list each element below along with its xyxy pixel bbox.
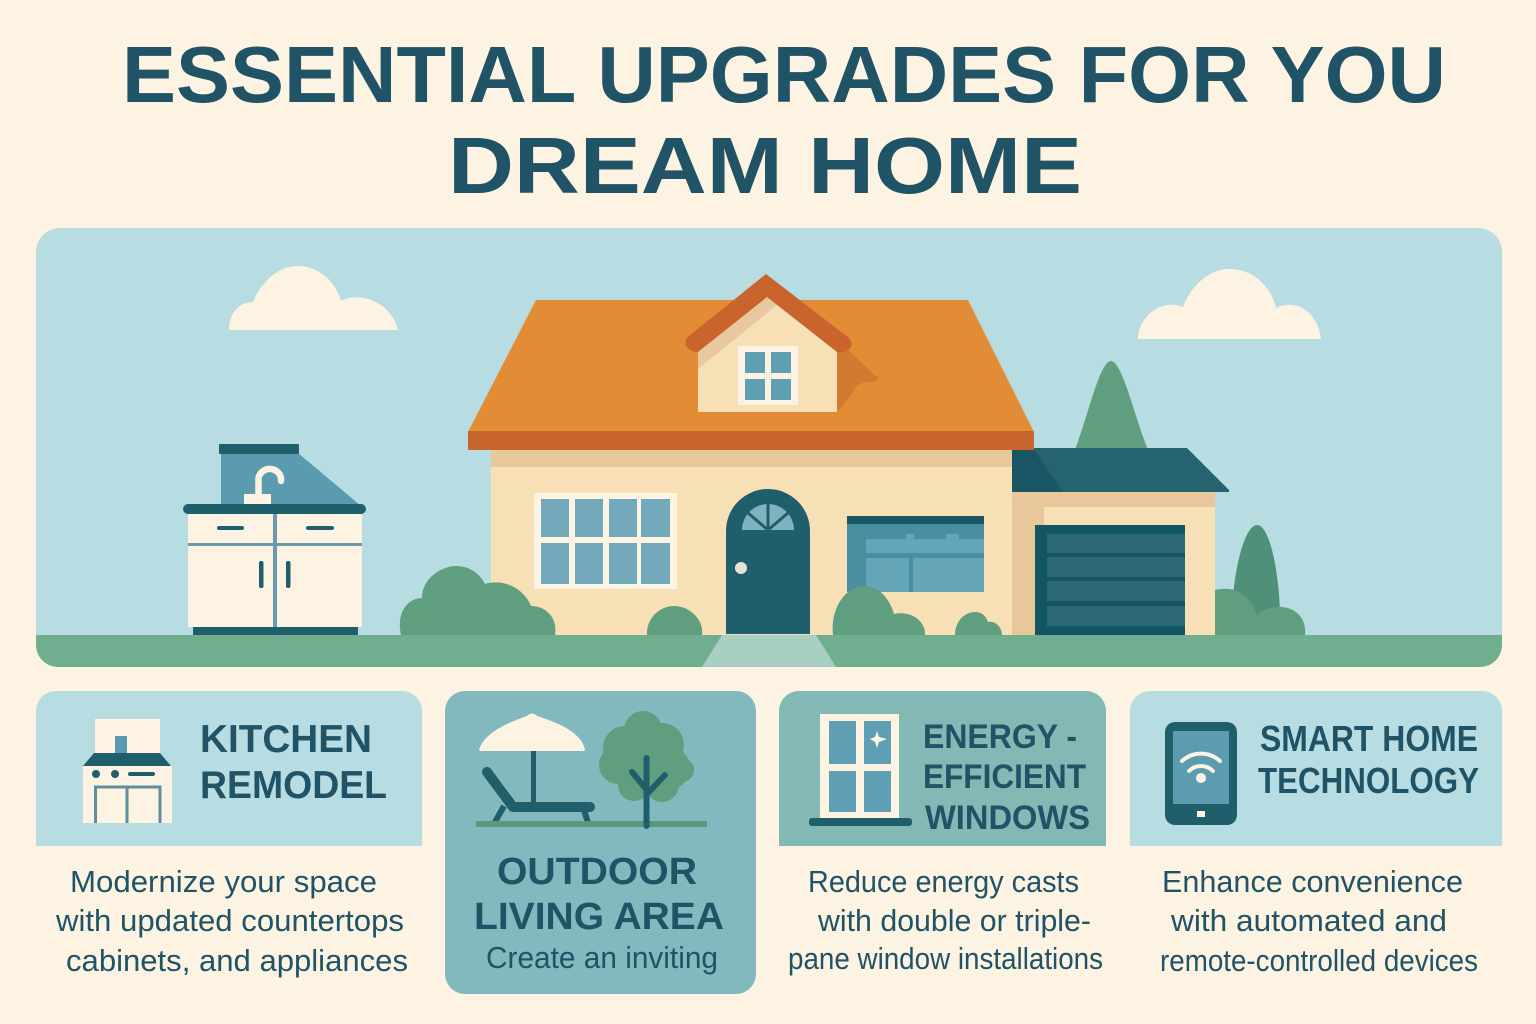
description: Modernize your space xyxy=(70,864,377,899)
panel: kitchen remodel xyxy=(36,691,422,978)
heading: LIVING AREA xyxy=(474,896,724,938)
description: remote-controlled devices xyxy=(1160,943,1478,978)
hood xyxy=(221,453,360,505)
panel: smart home technology xyxy=(1130,691,1502,978)
roof eave xyxy=(468,431,1034,450)
description xyxy=(1160,864,1478,978)
description: pane window installations xyxy=(788,941,1103,976)
description: Create an inviting xyxy=(486,940,718,975)
panel: house scene xyxy=(36,228,1502,667)
faucet xyxy=(244,469,281,505)
icon: tablet xyxy=(1165,722,1237,825)
ground line xyxy=(476,821,707,827)
header xyxy=(36,691,422,846)
heading: WINDOWS xyxy=(925,799,1090,837)
sky xyxy=(36,228,1502,667)
icon: kitchen illustration xyxy=(183,444,366,635)
wall xyxy=(491,445,1012,635)
icon: umbrella and lounger xyxy=(479,714,590,826)
roof xyxy=(468,300,1034,432)
heading: REMODEL xyxy=(200,764,387,807)
panel: outdoor living area xyxy=(445,691,756,994)
heading: ENERGY - xyxy=(923,718,1077,756)
icon: kitchen xyxy=(83,719,172,823)
heading: KITCHEN xyxy=(200,718,372,761)
heading xyxy=(474,851,724,938)
dormer shadow xyxy=(837,350,878,412)
counter xyxy=(183,504,366,514)
title: ESSENTIAL UPGRADES FOR YOU xyxy=(122,30,1446,119)
heading: EFFICIENT xyxy=(923,758,1086,796)
panel: energy-efficient windows xyxy=(779,691,1106,976)
heading xyxy=(1258,718,1479,801)
lawn xyxy=(36,635,1502,667)
cloud right xyxy=(1138,269,1321,339)
tree behind garage xyxy=(1075,361,1148,450)
dormer window xyxy=(738,346,798,405)
door fanlight xyxy=(742,504,794,530)
shrubs xyxy=(400,525,1305,635)
description: Reduce energy casts xyxy=(808,864,1079,899)
title: DREAM HOME xyxy=(448,121,1082,210)
heading xyxy=(923,718,1090,837)
heading: TECHNOLOGY xyxy=(1258,760,1479,801)
description: cabinets, and appliances xyxy=(66,943,408,978)
description: Enhance convenience xyxy=(1162,864,1463,899)
cabinet xyxy=(188,514,362,627)
heading: SMART HOME xyxy=(1260,718,1478,759)
large window xyxy=(534,493,677,589)
garage xyxy=(1012,448,1229,635)
description: with automated and xyxy=(1170,903,1447,938)
house xyxy=(468,274,1034,635)
title xyxy=(122,30,1446,210)
description xyxy=(788,864,1103,976)
heading xyxy=(200,718,387,807)
icon: tree xyxy=(599,711,694,826)
description: with double or triple- xyxy=(817,903,1091,938)
heading: OUTDOOR xyxy=(497,851,697,893)
description: with updated countertops xyxy=(55,903,404,938)
garden path xyxy=(702,635,836,667)
picture window xyxy=(847,516,984,592)
description xyxy=(55,864,408,978)
door xyxy=(726,489,810,634)
icon: window xyxy=(809,714,912,826)
cloud left xyxy=(229,266,398,330)
dormer xyxy=(698,297,837,412)
